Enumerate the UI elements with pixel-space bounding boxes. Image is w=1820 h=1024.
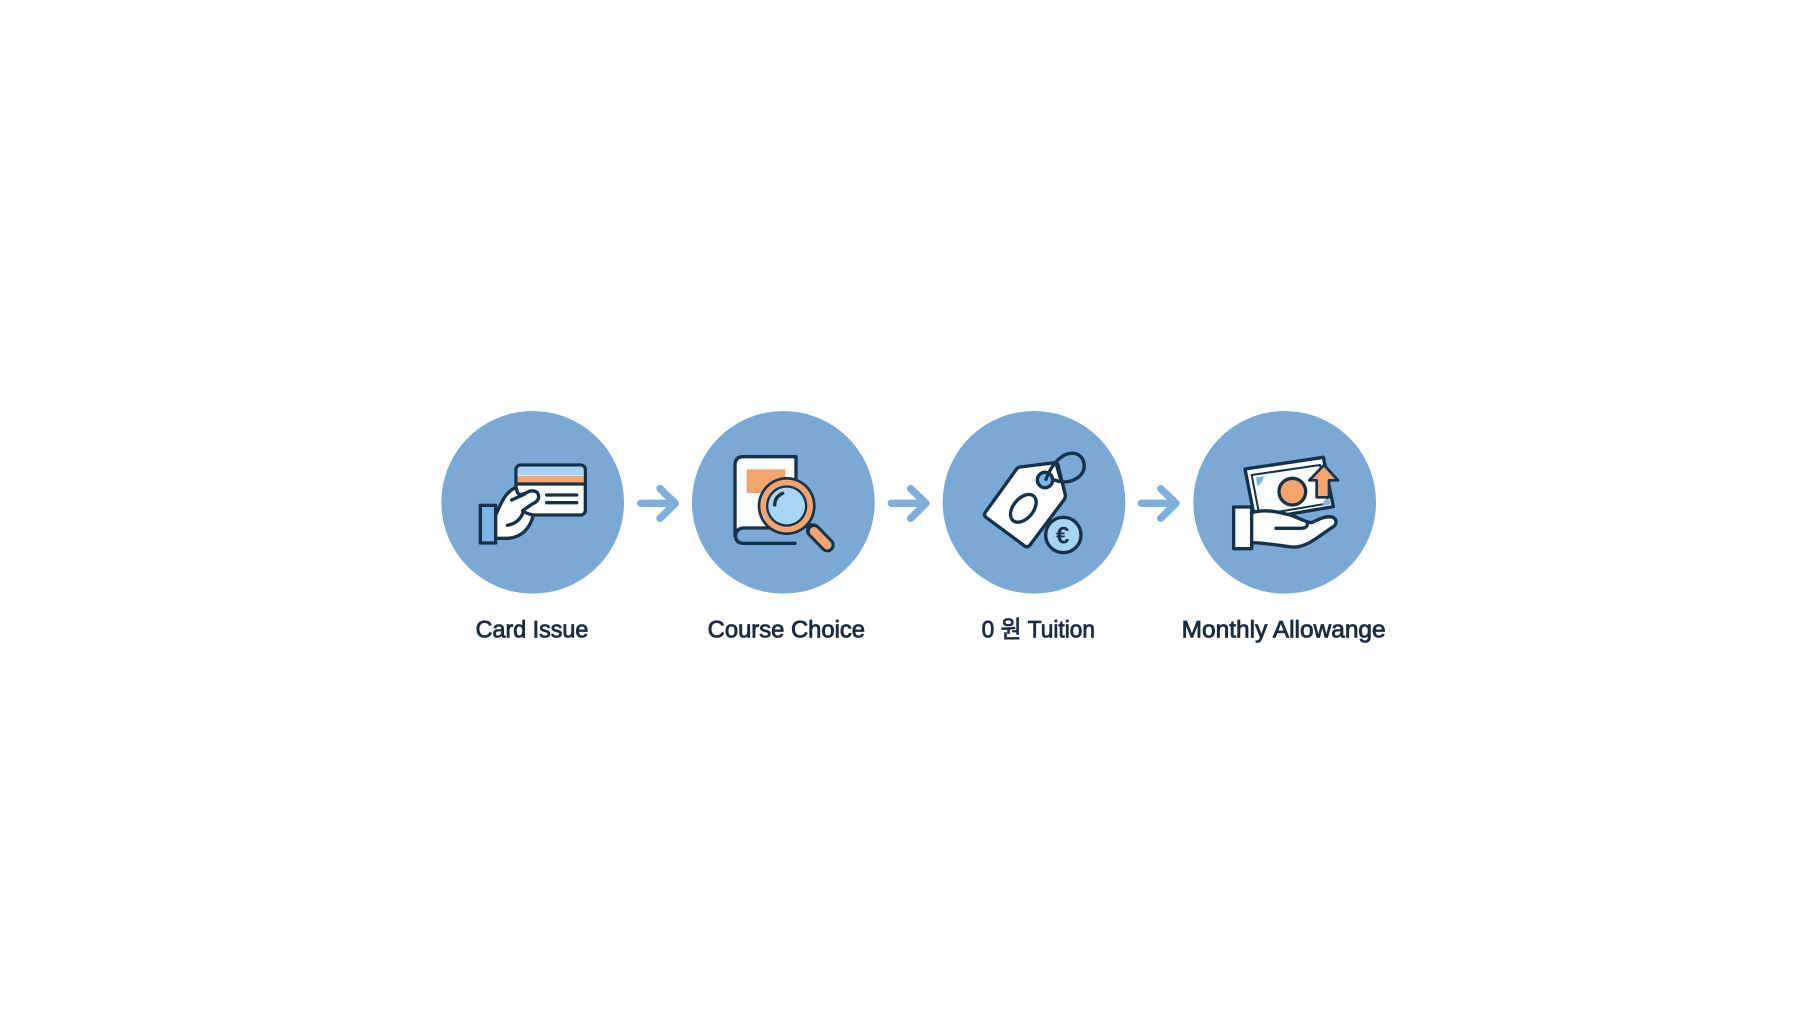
- icon: price tag with euro coin: [984, 453, 1084, 553]
- arrow 3: [1141, 489, 1176, 518]
- circle: tuition background: [943, 411, 1125, 594]
- icon: book and magnifying glass: [735, 457, 827, 545]
- label: zero won tuition: 0 원 Tuition: [982, 616, 1095, 643]
- step 4: monthly allowance: [1182, 411, 1386, 643]
- step 1: card issue: [441, 411, 624, 643]
- arrow 1: [641, 489, 675, 518]
- circle: card issue background: [441, 411, 624, 594]
- circle: monthly allowance background: [1193, 411, 1376, 594]
- icon: price tag with euro coin: €: [1056, 523, 1069, 550]
- label: monthly allowance: Monthly Allowange: [1182, 616, 1386, 643]
- icon: hand with banknote and up arrow: [1234, 457, 1338, 549]
- label: course choice: Course Choice: [708, 616, 865, 643]
- step 2: course choice: [692, 411, 875, 643]
- arrow 2: [891, 489, 926, 518]
- icon: hand holding card: [480, 465, 585, 543]
- step 3: zero won tuition: [943, 411, 1125, 643]
- label: card issue: Card Issue: [476, 616, 588, 643]
- circle: course choice background: [692, 411, 875, 594]
